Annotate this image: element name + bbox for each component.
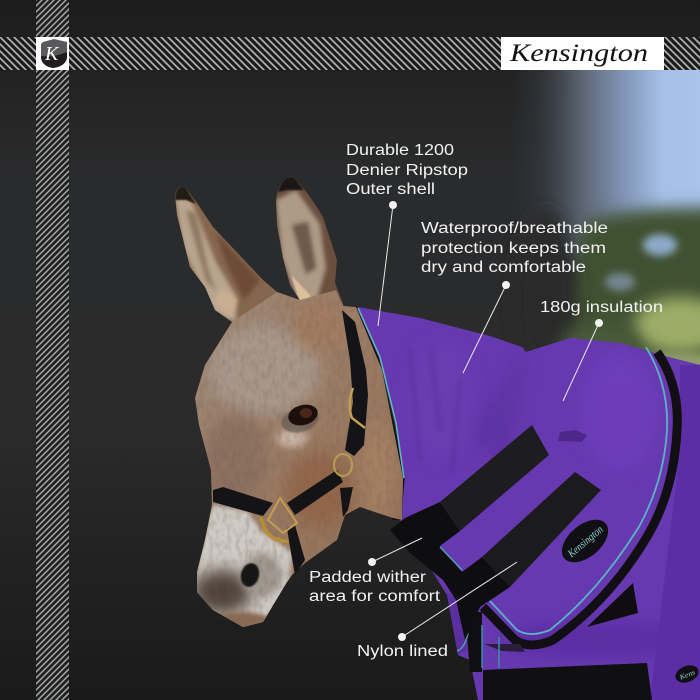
icon: Kensington shield logo: K: [44, 43, 60, 65]
donkey: [175, 177, 403, 627]
outer shell text: [346, 142, 468, 198]
waterproof text: Waterproof/breathable: [421, 220, 608, 237]
rug curved binding: [483, 352, 677, 645]
chin strap: [287, 525, 305, 575]
nose band: [213, 487, 273, 516]
chest padding: [390, 502, 510, 640]
badge: lower rug logo: Kens: [677, 668, 697, 682]
padded wither text: area for comfort: [309, 588, 441, 605]
head and neck: [195, 290, 403, 627]
brand wordmark: [501, 37, 664, 70]
callout: insulation: [540, 299, 663, 401]
purple side flap: [447, 592, 468, 655]
horizontal striped band: [0, 37, 700, 70]
brand wordmark: Kensington: [509, 40, 648, 67]
waterproof text: dry and comfortable: [421, 259, 586, 276]
crown strap: [342, 310, 368, 456]
bottom chest pocket: [483, 663, 652, 700]
waterproof text: [421, 220, 608, 276]
outer shell text: Outer shell: [346, 181, 435, 198]
brass buckles: [261, 517, 288, 542]
rug neck binding: [345, 306, 404, 520]
rug shading: [405, 340, 700, 700]
right ear: [276, 177, 344, 306]
badge: lower rug logo: [673, 662, 700, 686]
purple rug: [345, 306, 700, 700]
callout: nylon lined: [357, 562, 517, 660]
vertical striped band: [36, 0, 69, 700]
halter: [213, 310, 368, 575]
eye: [279, 401, 321, 437]
callout: waterproof: [421, 220, 608, 373]
velcro strap: lower: [482, 472, 601, 587]
left ear: [175, 186, 277, 322]
outer shell text: Durable 1200: [346, 142, 454, 159]
callout: nylon lined: Nylon lined: [357, 643, 448, 660]
outer shell text: Denier Ripstop: [346, 162, 468, 179]
badge: rug logo: [554, 511, 616, 571]
rug lower trim: [465, 612, 482, 672]
badge: rug logo: Kensington: [565, 523, 606, 560]
padded wither text: [309, 569, 441, 605]
callout: outer shell: [346, 142, 468, 326]
waterproof text: protection keeps them: [421, 240, 606, 257]
icon: Kensington shield logo: [36, 37, 69, 70]
callout: padded wither: [309, 538, 441, 605]
velcro strap: upper: [440, 425, 549, 531]
padded wither text: Padded wither: [309, 569, 426, 586]
lower flap shadow patch: [587, 583, 638, 627]
nostril: [240, 562, 260, 588]
callout: insulation: 180g insulation: [540, 299, 663, 316]
muzzle: [190, 505, 292, 630]
blurred outdoor background: [525, 70, 700, 365]
